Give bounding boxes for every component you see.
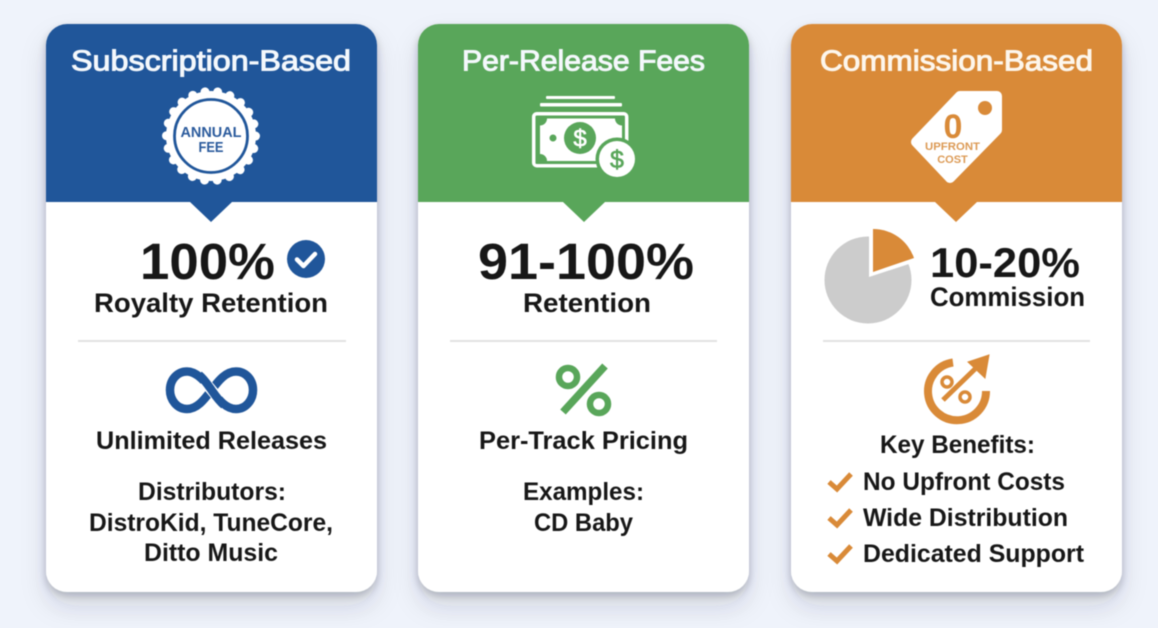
label: unlimited releases: Unlimited Releases: [96, 427, 327, 455]
benefit: no upfront costs: No Upfront Costs: [863, 468, 1065, 496]
icon: zero upfront cost tag: UPFRONT: [925, 141, 980, 153]
icon: percent: [559, 366, 608, 413]
list: benefits: [829, 468, 1085, 568]
icon: blue check badge: [287, 240, 325, 278]
label: per-track pricing: Per-Track Pricing: [479, 427, 688, 455]
icon: annual fee badge: [166, 91, 256, 181]
icon: cash stack: $: [610, 146, 624, 174]
stat: 100%: 100%: [140, 233, 275, 290]
chart: commission pie: [824, 229, 918, 324]
label: commission: Commission: [930, 282, 1085, 312]
icon: zero upfront cost tag: [916, 96, 997, 178]
text: distributors: Ditto Music: [144, 539, 278, 567]
text: examples: Examples:: [523, 478, 644, 506]
text: examples: [523, 478, 644, 537]
icon: cash stack: [534, 96, 638, 180]
benefit: wide distribution: Wide Distribution: [863, 504, 1068, 532]
icon: zero upfront cost tag: COST: [937, 154, 968, 166]
icon: annual fee badge: FEE: [198, 140, 224, 156]
panel: commission-based: [791, 24, 1122, 592]
heading: commission-based: Commission-Based: [820, 46, 1093, 78]
heading: per-release fees: Per-Release Fees: [462, 46, 705, 78]
text: distributors: [89, 478, 333, 567]
icon: cash stack: $: [573, 126, 587, 152]
heading: key benefits: Key Benefits:: [880, 431, 1035, 459]
text: distributors: DistroKid, TuneCore,: [89, 509, 333, 537]
panel: subscription-based: [46, 24, 377, 592]
benefit: dedicated support: Dedicated Support: [863, 540, 1085, 568]
header band: per-release fees: [418, 24, 749, 222]
heading: subscription-based: Subscription-Based: [71, 46, 351, 78]
label: royalty retention: Royalty Retention: [94, 288, 328, 318]
icon: percent growth arrow: [928, 355, 989, 420]
icon: zero upfront cost tag: 0: [944, 108, 962, 146]
stat: 10-20%: 10-20%: [930, 239, 1080, 286]
icon: infinity: [170, 372, 253, 409]
header band: commission-based: [791, 24, 1122, 222]
panel: per-release fees: [418, 24, 749, 592]
text: examples: CD Baby: [534, 509, 633, 537]
icon: annual fee badge: ANNUAL: [180, 124, 242, 141]
stat: 91-100%: 91-100%: [478, 233, 694, 290]
header band: subscription-based: [46, 24, 377, 222]
text: distributors: Distributors:: [138, 478, 286, 506]
label: retention: Retention: [523, 288, 651, 318]
